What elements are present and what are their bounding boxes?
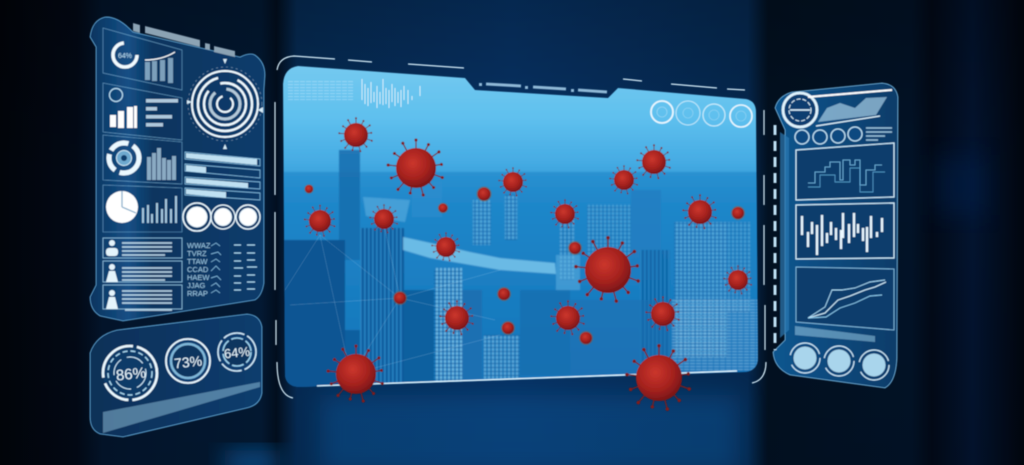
gauge 64%: [218, 333, 256, 371]
virus: [731, 206, 745, 220]
virus particles: [304, 118, 752, 411]
virus: [438, 203, 448, 213]
virus: [637, 145, 671, 179]
icon row on screen: [651, 101, 752, 127]
pie chart: [106, 191, 138, 223]
virus: [440, 301, 474, 335]
horizontal data bars: [146, 99, 178, 126]
three white circles: [183, 203, 260, 231]
data table: [187, 241, 257, 298]
panel: lower left gauges: [90, 314, 262, 437]
data table: CCAD: [187, 265, 209, 274]
soft focus wrapper: [90, 17, 898, 437]
panel: right dashboard: [773, 83, 898, 388]
virus: [551, 200, 579, 228]
top tabs: [133, 23, 235, 57]
virus: [304, 205, 335, 237]
donut gauge: [109, 143, 139, 173]
small text lines: [866, 128, 892, 140]
bottom white circles: [793, 346, 886, 377]
virus: [499, 168, 527, 196]
city skyline: [283, 150, 759, 390]
virus: [497, 287, 511, 301]
chart: candlesticks: [796, 203, 894, 259]
progress bars: [185, 152, 260, 200]
people rows: [103, 238, 182, 310]
gauge 86%: [103, 346, 157, 400]
dot column chart: [147, 148, 176, 180]
white bars: [110, 106, 137, 128]
box outlines: [103, 28, 182, 232]
gauge 73%: [166, 339, 210, 383]
virus: [646, 297, 680, 331]
virus: [610, 166, 638, 194]
small circle icon: [110, 88, 122, 102]
concentric radar: [187, 59, 263, 149]
gauge 64%: 64%: [223, 344, 251, 361]
waveform and data text in screen: [288, 79, 420, 108]
virus: [568, 241, 582, 255]
panel: central city screen: [275, 56, 766, 398]
text block lines: [103, 382, 260, 433]
virus: [432, 232, 460, 261]
side dashes: [775, 125, 789, 350]
gauge 64%: [113, 43, 137, 67]
chart: stepped lines: [796, 143, 894, 200]
data table: WWAZ: [187, 241, 211, 250]
four small dials: [795, 127, 862, 144]
emblem dial: [783, 93, 817, 127]
virus: [501, 321, 515, 335]
data table: TTAW: [187, 257, 208, 266]
data table: JJAG: [187, 281, 206, 290]
virus: [370, 204, 398, 233]
circle rings: [790, 343, 889, 380]
virus: [476, 186, 492, 202]
virus: [327, 345, 384, 402]
virus: [724, 266, 752, 294]
virus: [339, 118, 373, 152]
panel: upper left dashboard: [90, 17, 265, 321]
thin column chart: [143, 196, 176, 223]
data table: TVRZ: [187, 249, 207, 258]
screen frame: [275, 56, 766, 398]
data table: RRAP: [187, 289, 208, 298]
gauge 64%: 64%: [118, 53, 132, 60]
gauge 86%: 86%: [115, 364, 147, 385]
gauge 73%: 73%: [173, 353, 203, 371]
header graph: [808, 90, 892, 126]
virus: [579, 331, 593, 345]
virus: [551, 301, 585, 335]
text lines: [795, 326, 875, 342]
virus: [575, 237, 640, 303]
virus: [387, 139, 444, 196]
chart: line graph: [796, 267, 894, 330]
virus: [304, 184, 314, 194]
virus: [626, 345, 691, 411]
virus: [683, 195, 717, 229]
rising bar chart: [145, 52, 175, 83]
data table: HAEW: [187, 273, 210, 282]
virus: [393, 291, 407, 305]
